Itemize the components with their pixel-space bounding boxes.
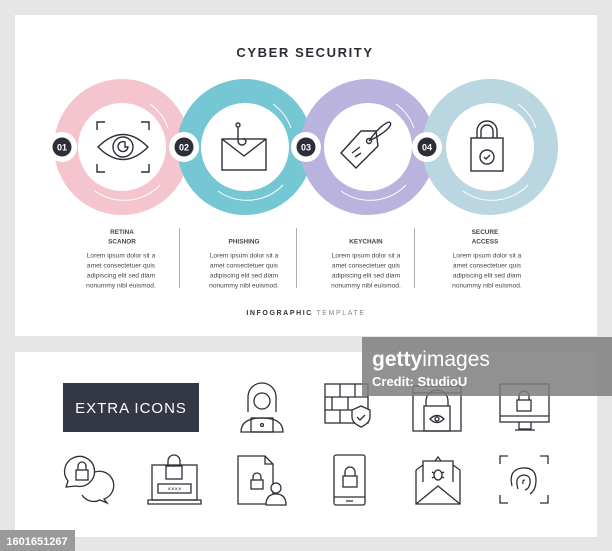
text column 2 bbox=[209, 238, 279, 290]
text column 1: Lorem ipsum dolor sit a bbox=[87, 252, 156, 260]
text column 1: RETINA bbox=[110, 229, 134, 236]
text column 1 bbox=[86, 229, 156, 290]
ring 2 bbox=[189, 91, 301, 203]
text column 4: amet consectetuer quis bbox=[453, 262, 522, 270]
text column 2: Lorem ipsum dolor sit a bbox=[210, 252, 279, 260]
panel: infographic bbox=[15, 15, 597, 336]
icon: fingerprint scan bbox=[500, 456, 548, 503]
subtitle: INFOGRAPHIC TEMPLATE bbox=[246, 310, 366, 317]
icon: locked file user bbox=[238, 456, 286, 505]
text column 3 bbox=[331, 238, 401, 290]
text column 2: adipiscing elit sed diam bbox=[210, 272, 279, 280]
badge 03: 03 bbox=[301, 142, 311, 152]
text column 4: ACCESS bbox=[472, 238, 499, 246]
panel: extra icons bbox=[15, 352, 597, 537]
ring 3 bbox=[312, 91, 424, 203]
badge 02 bbox=[169, 132, 199, 162]
text column 3: KEYCHAIN bbox=[349, 238, 383, 246]
title: CYBER SECURITY bbox=[236, 45, 374, 60]
icon: padlock check bbox=[471, 121, 503, 171]
text column 2: PHISHING bbox=[229, 238, 259, 246]
text column 4: adipiscing elit sed diam bbox=[453, 272, 522, 280]
text column 1: SCANOR bbox=[108, 238, 136, 246]
icon: hacker bbox=[241, 383, 283, 432]
ring 1 bbox=[66, 91, 178, 203]
icon: eye scan bbox=[97, 122, 149, 172]
text column 4 bbox=[452, 229, 522, 290]
image id label bbox=[0, 530, 75, 551]
watermark: Credit: StudioU bbox=[372, 374, 467, 389]
icon: laptop password bbox=[148, 455, 201, 504]
text column 1: nonummy nibl euismod. bbox=[86, 282, 156, 290]
text column 1: amet consectetuer quis bbox=[87, 262, 156, 270]
text column 4: Lorem ipsum dolor sit a bbox=[453, 252, 522, 260]
badge 04 bbox=[412, 132, 442, 162]
text column 2: amet consectetuer quis bbox=[210, 262, 279, 270]
icon: locked browser eye bbox=[413, 386, 461, 431]
text column 3: amet consectetuer quis bbox=[332, 262, 401, 270]
icon: chat lock bbox=[65, 456, 114, 503]
watermark bbox=[362, 337, 612, 396]
text column 3: Lorem ipsum dolor sit a bbox=[332, 252, 401, 260]
text column 3: nonummy nibl euismod. bbox=[331, 282, 401, 290]
text column 4: nonummy nibl euismod. bbox=[452, 282, 522, 290]
icon: tag bbox=[341, 122, 391, 168]
badge 01: 01 bbox=[57, 142, 67, 152]
badge 02: 02 bbox=[179, 142, 189, 152]
icon: monitor lock bbox=[500, 384, 549, 430]
icon: phone lock bbox=[334, 455, 365, 505]
badge 01 bbox=[47, 132, 77, 162]
text column 3: adipiscing elit sed diam bbox=[332, 272, 401, 280]
watermark: gettyimages bbox=[372, 348, 490, 371]
text column 1: adipiscing elit sed diam bbox=[87, 272, 156, 280]
badge 04: 04 bbox=[422, 142, 432, 152]
image id label: 1601651267 bbox=[6, 536, 68, 548]
icon: phishing envelope bbox=[222, 123, 266, 170]
icon: firewall shield bbox=[325, 384, 370, 427]
icon: laptop password: ×××× bbox=[167, 487, 182, 493]
badge 03 bbox=[291, 132, 321, 162]
extra icons label: EXTRA ICONS bbox=[75, 400, 187, 417]
extra icons label bbox=[63, 383, 199, 432]
text column 2: nonummy nibl euismod. bbox=[209, 282, 279, 290]
ring 4 bbox=[434, 91, 546, 203]
text column 4: SECURE bbox=[472, 229, 499, 236]
icon: email bug bbox=[416, 457, 460, 504]
